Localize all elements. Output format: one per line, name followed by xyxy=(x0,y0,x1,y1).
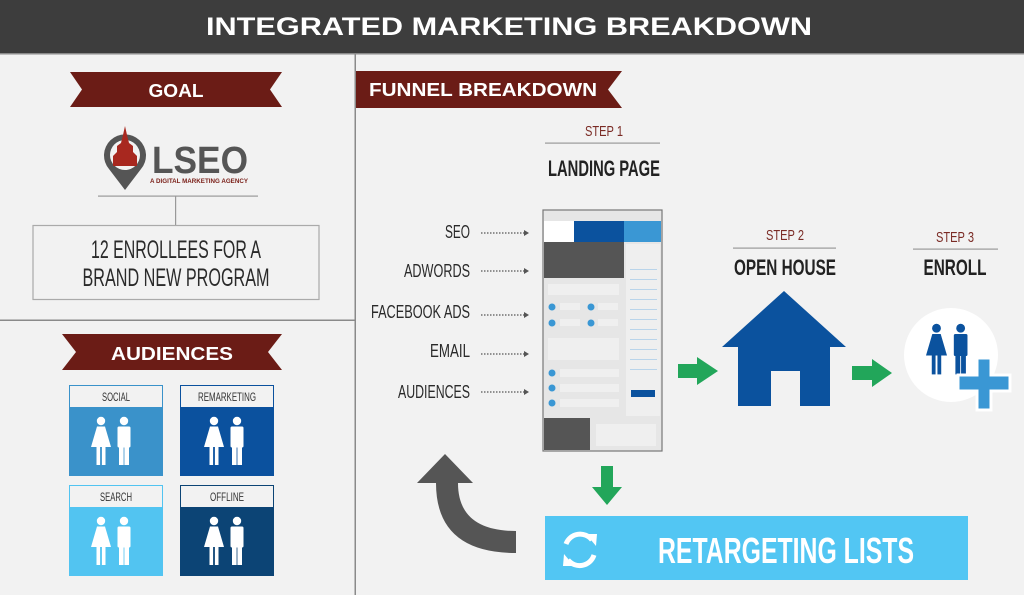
channel labels xyxy=(371,222,470,402)
icon: enroll xyxy=(904,308,1010,410)
ribbon: audiences xyxy=(62,334,282,370)
step 3 heading xyxy=(913,229,998,280)
step 2 heading: OPEN HOUSE xyxy=(734,255,836,280)
channel labels: AUDIENCES xyxy=(398,382,470,402)
ribbon: funnel breakdown: FUNNEL BREAKDOWN xyxy=(369,80,597,100)
icon: refresh xyxy=(566,534,594,566)
panel: goal xyxy=(33,72,319,300)
ribbon: funnel breakdown xyxy=(356,71,622,108)
tile: social: SOCIAL xyxy=(102,390,130,404)
dotted arrows xyxy=(481,230,529,395)
arrow: green down xyxy=(592,466,622,505)
step 1 heading: LANDING PAGE xyxy=(548,156,660,181)
tile: offline xyxy=(180,485,274,576)
panel: audiences xyxy=(62,334,282,576)
tile: offline: OFFLINE xyxy=(210,490,244,504)
channel labels: FACEBOOK ADS xyxy=(371,302,470,322)
goal box: BRAND NEW PROGRAM xyxy=(82,264,270,292)
logo: LSEO: LSEO xyxy=(152,140,248,182)
arrow: green to open house xyxy=(678,357,718,385)
logo: LSEO: A DIGITAL MARKETING AGENCY xyxy=(150,178,249,185)
ribbon: goal xyxy=(70,72,282,107)
goal box xyxy=(33,226,319,300)
logo: LSEO xyxy=(104,126,249,190)
goal box: 12 ENROLLEES FOR A xyxy=(91,236,261,264)
retargeting lists bar: RETARGETING LISTS xyxy=(658,530,914,571)
channel labels: SEO xyxy=(445,222,470,242)
step 1 heading: STEP 1 xyxy=(585,123,623,140)
tile: search: SEARCH xyxy=(100,490,132,504)
ribbon: goal: GOAL xyxy=(148,81,204,101)
ribbon: audiences: AUDIENCES xyxy=(111,344,233,364)
landing page mockup xyxy=(543,210,662,451)
tile: social xyxy=(69,385,163,476)
icon: house xyxy=(722,291,846,406)
tile: search xyxy=(69,485,163,576)
step 2 heading: STEP 2 xyxy=(766,227,804,244)
tile: remarketing: REMARKETING xyxy=(198,390,256,404)
step 3 heading: STEP 3 xyxy=(936,229,974,246)
step 1 heading xyxy=(545,123,660,181)
header bar xyxy=(0,0,1024,54)
arrow: gray curved xyxy=(417,454,516,553)
arrow: green to enroll xyxy=(852,359,892,387)
step 3 heading: ENROLL xyxy=(924,255,986,280)
channel labels: EMAIL xyxy=(430,341,470,361)
retargeting lists bar xyxy=(545,516,968,580)
step 2 heading xyxy=(733,227,836,280)
channel labels: ADWORDS xyxy=(404,261,470,281)
title: INTEGRATED MARKETING BREAKDOWN xyxy=(206,13,812,41)
tile: remarketing xyxy=(180,385,274,476)
